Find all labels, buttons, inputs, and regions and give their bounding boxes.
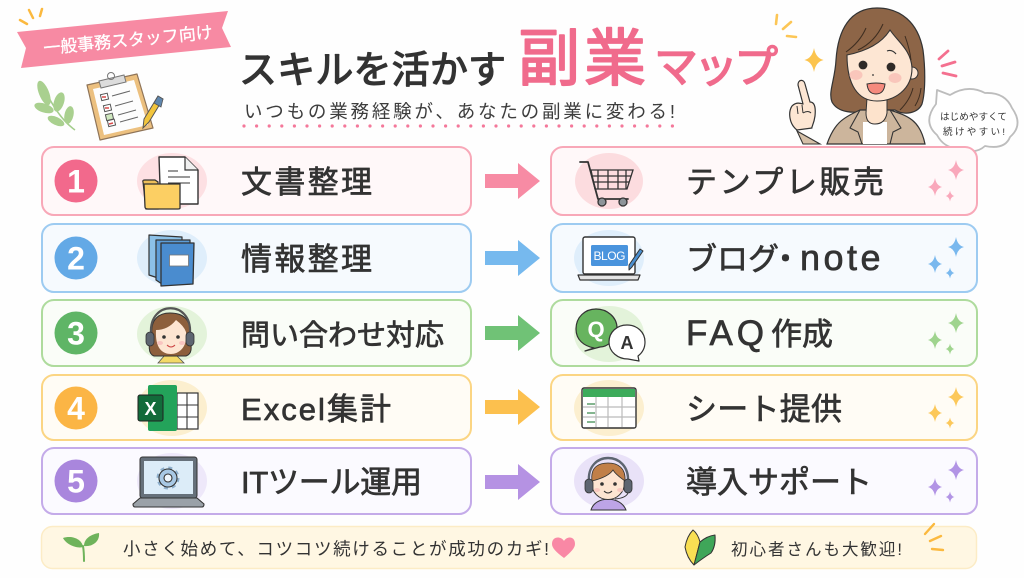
icon: Q and A bubbles: Q	[587, 317, 605, 342]
badge 2: 2	[67, 240, 85, 276]
badge 1	[54, 160, 98, 202]
icon: clipboard	[87, 72, 163, 140]
badge 4	[54, 386, 98, 430]
sparkles	[928, 387, 964, 428]
speech bubble: はじめやすくて	[940, 112, 1007, 123]
label: 文書整理	[241, 165, 372, 200]
badge 4: 4	[67, 390, 85, 426]
icon: shopping cart	[575, 153, 643, 209]
arrow 4	[485, 389, 540, 425]
row 3 right panel	[551, 300, 977, 366]
arrow 2	[485, 240, 540, 276]
label: ブログ	[686, 242, 779, 277]
footer message: 小さく始めて、コツコツ続けることが成功のカギ!	[123, 539, 549, 559]
title: 副業	[518, 25, 646, 94]
row 5 left panel	[42, 448, 471, 514]
icon: spreadsheet	[574, 380, 644, 436]
icon: folder and document	[137, 153, 207, 209]
badge 1: 1	[67, 164, 85, 200]
icon: blog laptop	[574, 230, 644, 286]
title	[239, 25, 778, 94]
badge 5	[54, 460, 98, 502]
row 2 left panel	[42, 224, 471, 292]
title: マップ	[654, 43, 778, 92]
row 1 right panel	[551, 147, 977, 215]
speech bubble	[929, 89, 1018, 151]
badge 3: 3	[67, 316, 85, 352]
label: 導入サポート	[686, 465, 872, 500]
ribbon tag: 一般事務スタッフ向け	[43, 23, 214, 58]
icon: blue binders	[137, 230, 207, 286]
row 3 left panel	[42, 300, 471, 366]
title: スキルを活かす	[239, 50, 506, 92]
label: FAQ	[686, 314, 768, 353]
arrow 3	[485, 315, 540, 351]
row 2 right panel	[551, 224, 977, 292]
label: 作成	[771, 317, 833, 352]
icon: leaf branch	[33, 79, 75, 130]
label: 情報整理	[241, 242, 372, 277]
icon: Q and A bubbles: A	[620, 333, 634, 353]
icon: Excel: X	[144, 399, 157, 419]
icon: laptop with gear	[133, 453, 207, 509]
icon: heart	[552, 538, 575, 558]
label: テンプレ販売	[686, 165, 884, 200]
arrow 1	[485, 163, 540, 199]
icon: Excel	[137, 380, 207, 436]
sparkles	[928, 160, 964, 202]
arrow 5	[485, 464, 540, 500]
speech bubble: 続けやすい!	[943, 126, 1005, 138]
label: 問い合わせ対応	[241, 319, 444, 352]
sparkles	[928, 460, 964, 502]
ribbon tag	[17, 9, 231, 68]
label: ITツール運用	[241, 465, 422, 500]
icon: blog laptop: BLOG	[594, 249, 626, 263]
icon: Q and A bubbles	[574, 306, 645, 362]
label: シート提供	[686, 392, 842, 427]
subtitle: いつもの業務経験が、あなたの副業に変わる!	[244, 101, 675, 122]
icon: headset operator	[137, 306, 207, 363]
label: note	[800, 237, 884, 278]
title decorative accents	[776, 15, 956, 76]
woman character	[790, 8, 925, 144]
footer banner	[42, 524, 976, 568]
icon: sprout	[63, 533, 99, 561]
beginner message: 初心者さんも大歓迎!	[731, 540, 902, 559]
sparkles	[928, 313, 964, 354]
badge 2	[54, 236, 98, 280]
badge 3	[54, 312, 98, 354]
row 4 right panel	[551, 375, 977, 440]
icon: support person	[574, 453, 644, 510]
sparkles	[928, 237, 964, 278]
label: Excel集計	[241, 392, 391, 427]
label: ・	[770, 242, 801, 277]
accent lines	[925, 524, 943, 550]
icon: beginner mark	[685, 530, 715, 565]
row 1 left panel	[42, 147, 471, 215]
row 4 left panel	[42, 375, 471, 440]
row 5 right panel	[551, 448, 977, 514]
badge 5: 5	[67, 464, 85, 500]
